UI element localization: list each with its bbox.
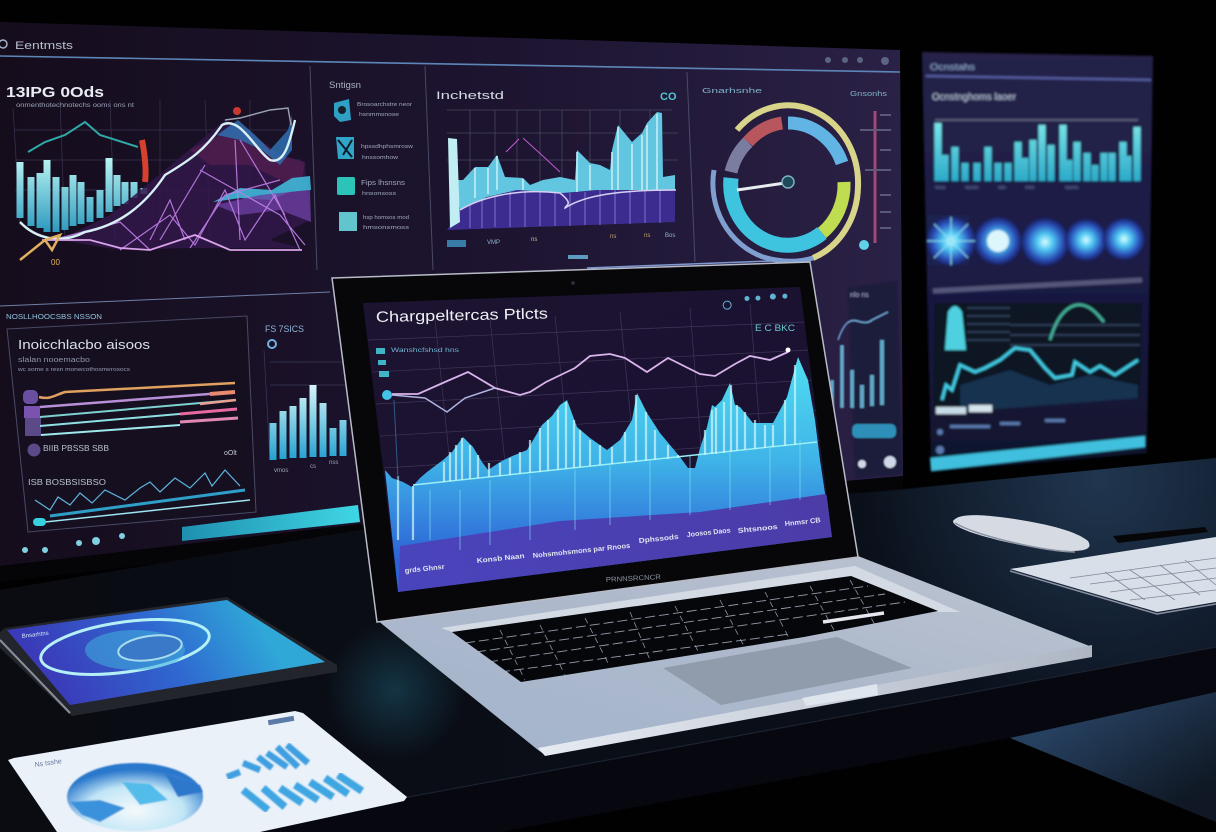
text: display axis labels: Dphssods	[638, 534, 679, 545]
panel: monitor corner right of laptop	[832, 281, 902, 478]
heading: monitor title: Eentmsts	[15, 40, 74, 52]
panel: desk	[0, 458, 1216, 832]
panel: icon list	[329, 80, 413, 231]
text: list item labels: hsnmmsnose	[359, 112, 399, 118]
heading: right monitor title: Ocnstnghoms laoer	[932, 92, 1017, 103]
decoration: hinge notch	[802, 684, 878, 706]
chart: progress line two	[40, 392, 235, 407]
text: list item labels: hpssdhphsmrosw	[361, 144, 413, 150]
chart: progress line four	[40, 409, 237, 426]
text: right monitor axis labels: nnss	[935, 185, 946, 191]
chart: grey line	[392, 388, 495, 412]
text: display axis labels	[404, 517, 821, 575]
chart: purple lower bars	[447, 190, 675, 230]
chart: start marker	[382, 390, 392, 400]
text: legend text: Wanshcfshsd hns	[391, 347, 460, 354]
text: list item labels: Brosoarchstre neor	[357, 102, 412, 108]
chart: report pie	[67, 763, 203, 831]
panel: laptop display	[363, 287, 840, 600]
heading: progress title: Inoicchlacbo aisoos	[18, 337, 151, 352]
chart: corner line	[838, 312, 888, 340]
chart: purple mesh area	[60, 120, 310, 250]
chart: small cyan hump	[945, 306, 966, 350]
text: display axis labels: Konsb Naan	[476, 553, 525, 565]
chart: tablet outer ring	[37, 610, 213, 684]
decoration: lower shelf	[1010, 692, 1216, 822]
chart: laptop baseline	[413, 442, 817, 485]
text: display axis labels: Nohsmohsmons par Rnoos	[532, 543, 631, 560]
text: small chart axis: cs	[310, 464, 316, 470]
heading: small chart title: FS 7SICS	[265, 324, 304, 334]
panel: large background monitor	[0, 22, 903, 582]
chart: left tall bar	[448, 138, 460, 228]
chart: right monitor bars	[938, 123, 1137, 181]
decoration: keyboard tray highlight	[441, 566, 960, 632]
chart: gauge ring cyan segment	[731, 178, 822, 245]
icon: display toolbar	[723, 293, 788, 309]
icon: pen	[1113, 527, 1208, 543]
decoration: laptop base	[377, 556, 1092, 755]
heading: mesh chart title: 13IPG 0Ods	[6, 84, 104, 101]
chart: gauge outer blue arc	[713, 170, 813, 261]
icon: monitor logo	[0, 40, 7, 48]
text: right monitor axis labels: nsons	[1065, 185, 1079, 191]
text: list item labels: hmsonsmoss	[363, 225, 409, 231]
chart: gauge ring gray segment	[731, 142, 748, 172]
text: central chart axis chips: Bos	[665, 233, 675, 239]
text: small chart axis: nss	[329, 460, 338, 466]
text: display axis labels: Shtsnoos	[737, 524, 778, 535]
text: display axis labels: Hnmsr CB	[784, 517, 821, 528]
chart: gauge needle	[737, 183, 785, 190]
text: legend text: BIIB PBSSB SBB	[43, 444, 109, 453]
chart: lower teal track	[50, 490, 245, 516]
text: progress subtitle: slalan nooemacbo	[18, 357, 90, 364]
chart: gauge outer yellow arc	[737, 105, 858, 258]
decoration: right teal strip	[930, 436, 1145, 471]
text: small values: oOlt	[224, 450, 237, 457]
text: laptop brand: PRNNSRCNCR	[606, 574, 661, 584]
text: list item labels: hnssomhow	[362, 155, 398, 161]
icon: corner button	[852, 424, 896, 438]
chart: tablet glow	[85, 630, 185, 670]
icon: track slider	[33, 518, 46, 526]
panel: right monitor	[922, 52, 1153, 472]
panel: printed report	[8, 711, 407, 832]
text: gauge tag: Gnsonhs	[850, 91, 888, 98]
chart: waveform fill	[960, 370, 1138, 412]
chart: trend line	[460, 190, 676, 210]
text: right monitor axis labels	[935, 185, 1079, 191]
chart: laptop bright bars	[398, 365, 795, 540]
text: list item labels: hsp homsos mod	[363, 215, 409, 221]
chart: laptop lower band	[398, 494, 840, 600]
chart: light blue skyline	[456, 112, 675, 210]
icon: corner circles	[858, 456, 896, 468]
chart: gauge hub	[782, 176, 794, 188]
chart: small bars	[273, 385, 343, 460]
text: central chart axis chips: ns	[644, 233, 650, 239]
chart: pink line	[506, 138, 560, 172]
chart: report upper bars	[227, 745, 308, 777]
chart: side scale	[874, 111, 876, 243]
chart: cyan bars	[20, 158, 144, 232]
text: central chart axis chips: VMP	[487, 240, 500, 246]
text: right monitor axis labels: mns	[1025, 185, 1035, 191]
text: tablet label: Bnsarhtns	[22, 631, 49, 640]
text: display axis labels: Joosos Daos	[686, 527, 731, 539]
icon: list item one	[334, 99, 351, 122]
heading: right monitor brand: Ocnstahs	[930, 62, 976, 72]
text: list item labels: Fips lhsnsns	[361, 180, 406, 187]
chart: end marker	[786, 348, 790, 352]
icon: window controls	[825, 57, 889, 65]
text: lower chart label: ISB BOSBSISBSO	[28, 478, 106, 487]
chart: jagged lower sparkline	[35, 470, 240, 510]
chart: progress line one	[39, 383, 235, 398]
decoration: laptop front lip	[538, 645, 1092, 756]
chart: bright trend line	[20, 120, 295, 239]
chart: gauge ring lime segment	[822, 182, 844, 233]
text: right monitor axis labels: nsn	[998, 185, 1006, 191]
panel: laptop	[332, 262, 1092, 756]
chart: light bar highlights	[475, 114, 657, 198]
chart: blue peak	[217, 115, 292, 165]
chart: red marker	[142, 140, 146, 182]
icon: list item two	[336, 137, 354, 159]
chart: report lower bars	[243, 775, 362, 810]
text: chart labels: 00	[51, 258, 60, 267]
heading: central chart title: Inchetstd	[436, 90, 504, 102]
heading: list title: Sntigsn	[329, 80, 361, 90]
chart: orange connector	[20, 235, 60, 260]
chart: green arc line	[1050, 305, 1104, 340]
decoration: laptop lid bezel	[332, 262, 858, 622]
chart: teal line	[28, 122, 138, 152]
text: mesh chart subtitle: onmenthotechnotechs ooms ons nt	[16, 103, 134, 109]
chart: gauge ring blue segment	[788, 123, 842, 163]
heading: section label: NOSLLHOOCSBS NSSON	[6, 312, 102, 321]
chart: lower right panel	[934, 303, 1142, 415]
text: central chart axis chips	[447, 233, 675, 247]
text: progress caption: wc some s resn monwcothosmerosocs	[17, 367, 130, 373]
icon: webcam	[571, 281, 575, 285]
text: right monitor axis labels: nsonn	[965, 185, 979, 191]
text: list item labels: hnsonsoss	[362, 191, 396, 197]
chart: cyan waveform	[942, 348, 1138, 400]
icon: laptop keyboard	[452, 576, 938, 682]
icon: footer chips	[936, 419, 1065, 454]
decoration: teal strip	[182, 505, 360, 541]
chart: purple line	[392, 352, 788, 395]
icon: list item four	[339, 212, 357, 231]
icon: trackpad	[663, 637, 912, 705]
chart: gauge ring red segment	[748, 123, 782, 142]
chart: lower violet line	[42, 235, 302, 250]
icon: legend chips	[23, 390, 41, 456]
text: report tag	[268, 716, 294, 725]
decoration: desk front face	[220, 647, 1216, 832]
text: display axis labels: grds Ghnsr	[404, 564, 445, 575]
icon: list item three	[337, 177, 355, 195]
panel: small bar chart	[264, 324, 345, 474]
panel: progress lines	[6, 312, 360, 553]
icon: legend swatches	[376, 348, 389, 377]
icon: spiral	[268, 340, 276, 348]
text: display tag: E C BKC	[755, 323, 796, 333]
icon: gauge dot	[859, 240, 869, 250]
chart: cyan band	[213, 176, 311, 202]
icon: light buttons	[936, 407, 966, 414]
icon: taskbar icons	[22, 533, 125, 553]
chart: orb row	[926, 215, 1145, 266]
panel: tablet	[0, 597, 337, 716]
heading: laptop display title: Chargpeltercas Ptlcts	[376, 305, 548, 326]
text: report label: Ns tsshe	[34, 758, 62, 769]
icon: external keyboard	[1010, 537, 1216, 614]
icon: bottom tag	[568, 255, 588, 259]
chart: progress line three	[40, 400, 235, 417]
chart: tablet inner ring	[117, 632, 183, 664]
panel: mesh chart	[6, 84, 311, 267]
chart: corner bars	[832, 340, 882, 410]
text: list item labels	[357, 102, 413, 231]
panel: central bar chart	[436, 90, 678, 259]
heading: gauge title: Gnarhsnhe	[702, 88, 762, 95]
panel: gauge	[702, 88, 891, 261]
text: central chart axis chips: ns	[531, 237, 537, 243]
text: small chart axis	[274, 460, 338, 474]
chart: progress line five	[41, 418, 238, 435]
text: corner label: nlo ns	[850, 292, 869, 299]
chart: laptop area	[385, 357, 832, 592]
icon: mouse	[953, 515, 1089, 552]
text: central chart axis chips: ns	[610, 234, 616, 240]
text: small chart axis: vmos	[274, 468, 288, 474]
icon: chart badge: CO	[660, 91, 677, 103]
